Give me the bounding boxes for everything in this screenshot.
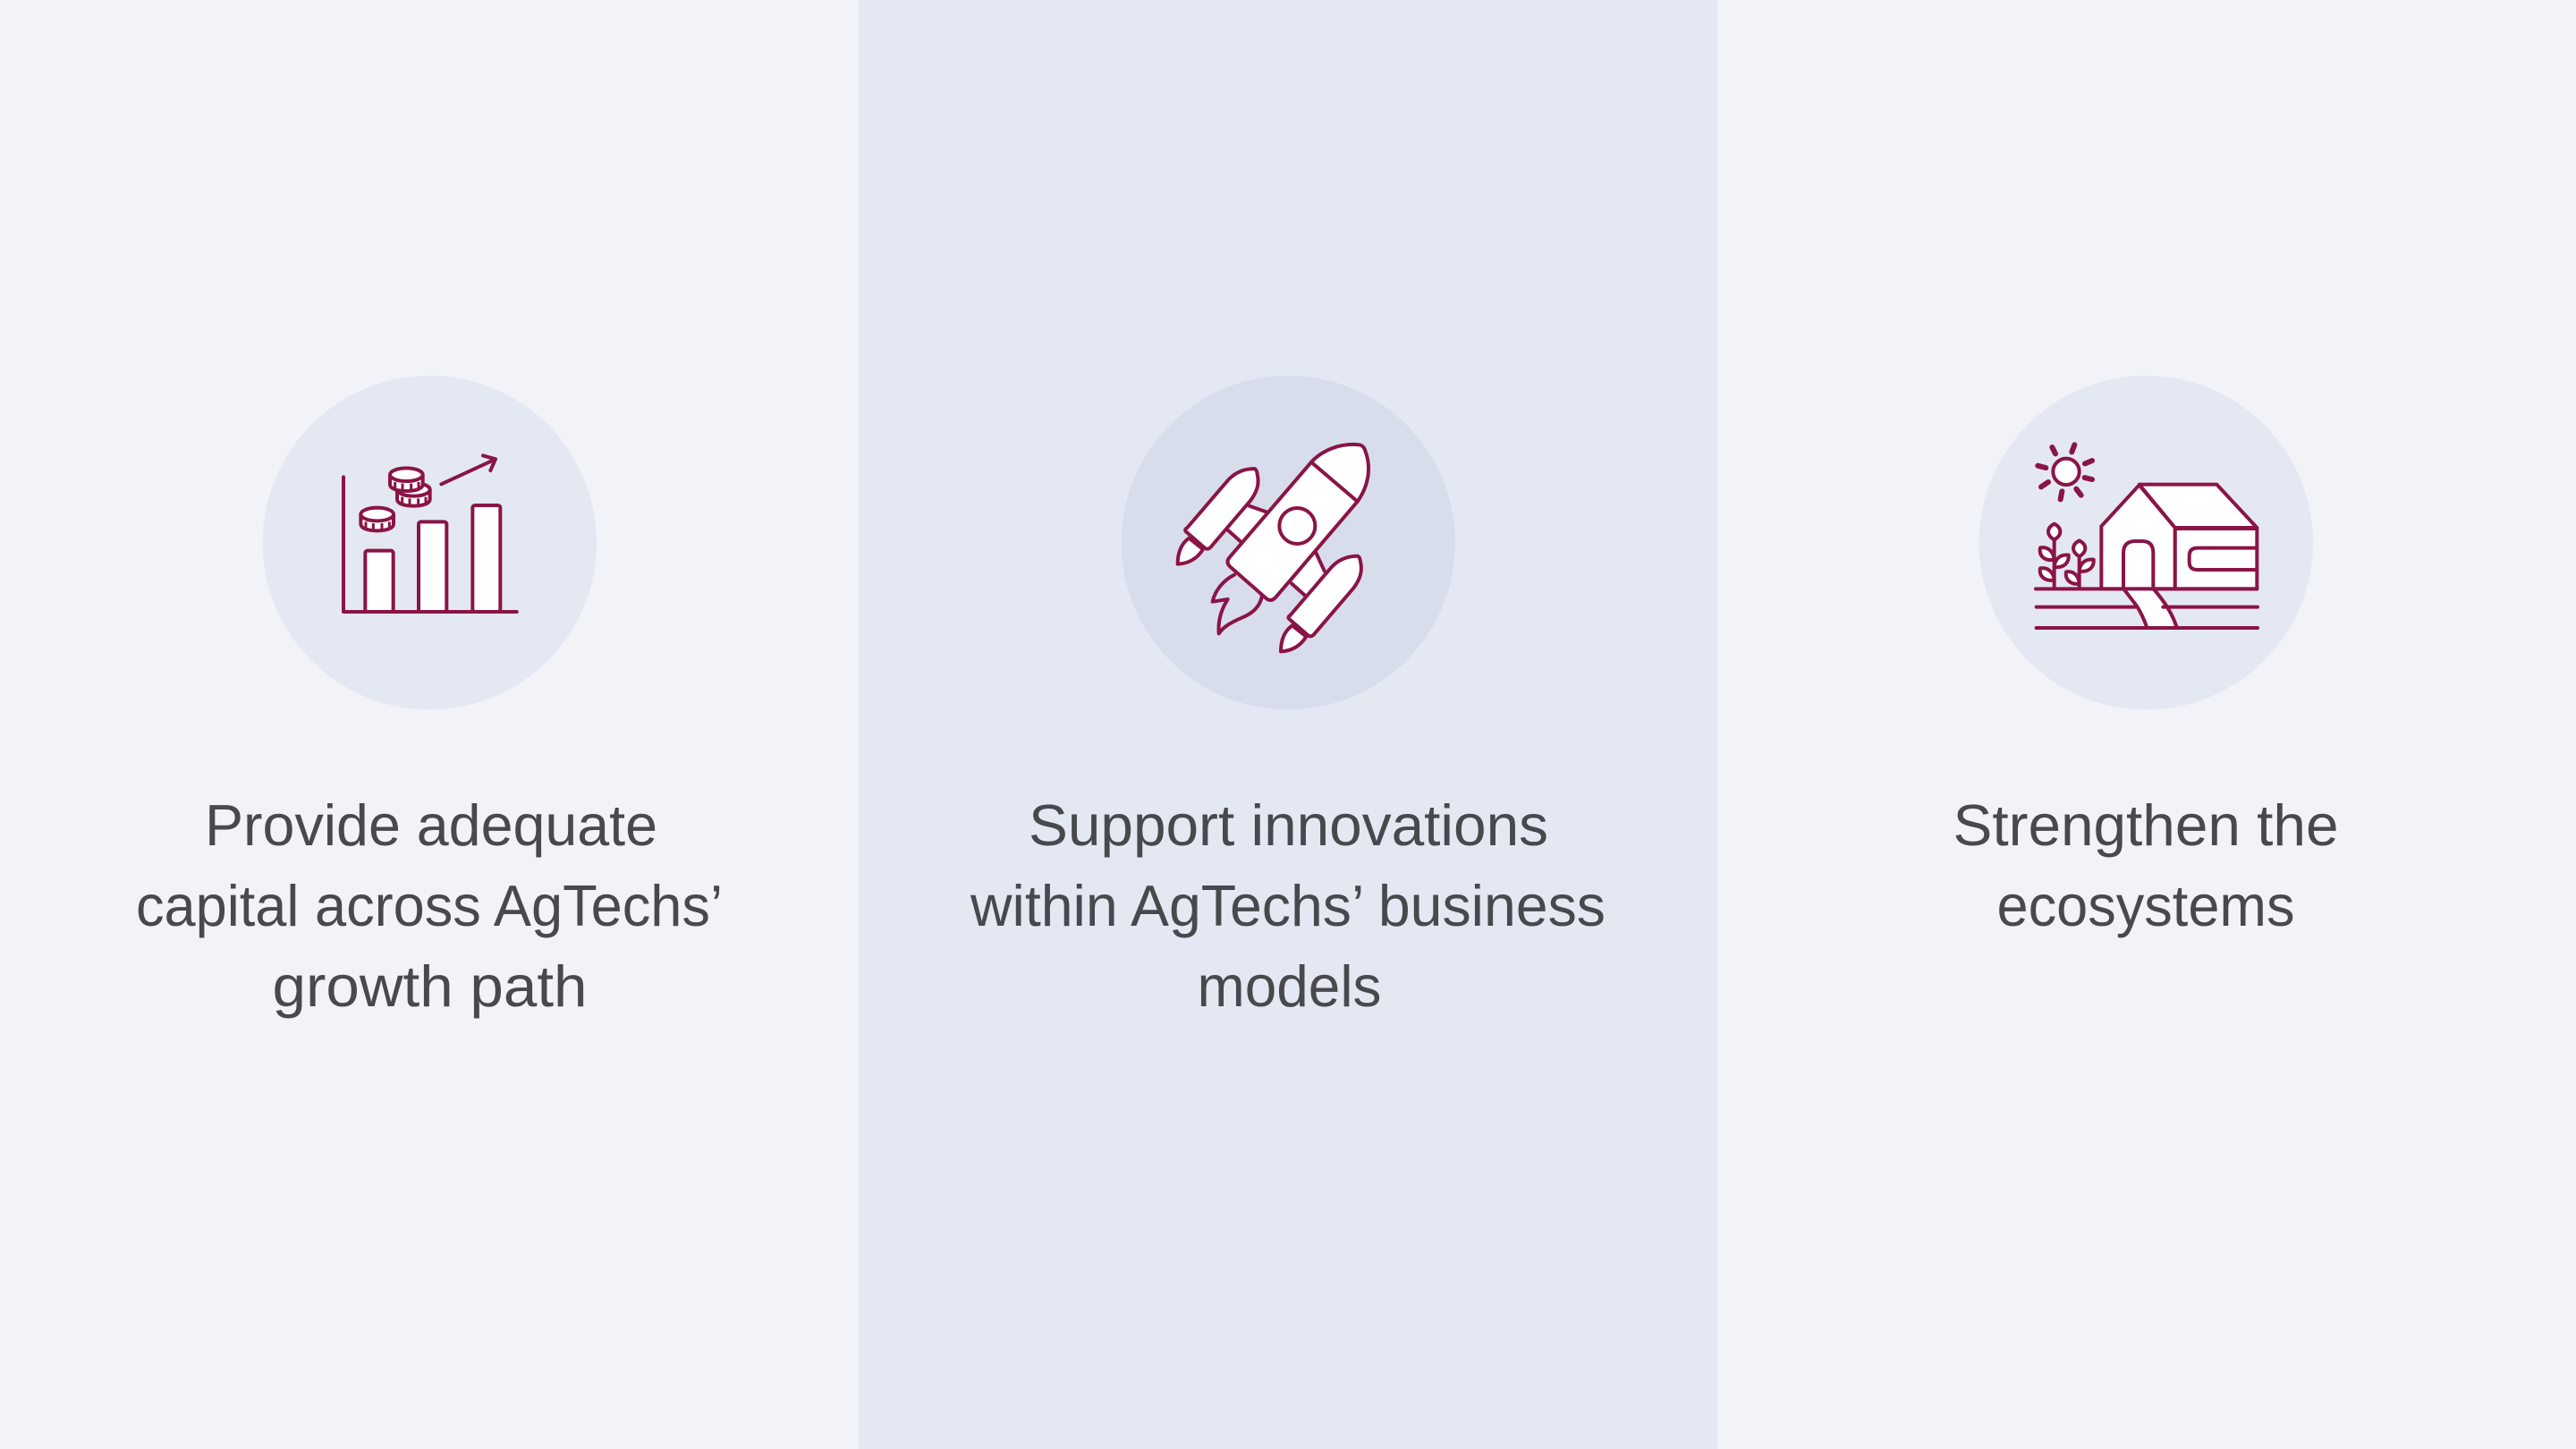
sun <box>2038 445 2092 499</box>
left booster <box>1178 469 1258 564</box>
icon circle: ecosystem <box>1979 376 2313 709</box>
text: capital: capital across AgTechs’ <box>136 873 723 938</box>
text: innovation: models <box>1197 953 1381 1019</box>
text: ecosystem: Strengthen the <box>1953 792 2338 858</box>
house front <box>2101 485 2175 589</box>
icon circle: capital <box>263 376 597 709</box>
house door <box>2123 541 2153 589</box>
rocket window <box>1279 508 1315 544</box>
text: innovation: Support innovations <box>1029 792 1548 858</box>
plant: tall <box>2040 524 2069 588</box>
plant: short <box>2066 540 2094 588</box>
garden path <box>2124 589 2176 627</box>
text: capital: Provide adequate <box>205 792 657 858</box>
panel: middle background <box>859 0 1717 1449</box>
text: capital <box>136 792 723 1019</box>
icon: rocket with boosters <box>1178 445 1368 651</box>
connector struts <box>1228 505 1325 597</box>
panel: left background <box>0 0 859 1449</box>
coin: single <box>360 508 394 530</box>
text: innovation <box>970 792 1606 1019</box>
text: ecosystem: ecosystems <box>1996 873 2295 938</box>
right booster <box>1281 556 1361 651</box>
house side <box>2175 529 2257 589</box>
chart bars <box>365 505 500 612</box>
panel: right background <box>1717 0 2576 1449</box>
icon circle: innovation <box>1122 376 1455 709</box>
main flame <box>1213 575 1262 633</box>
coin: stack lower <box>397 483 430 506</box>
icon: bar chart with coins and arrow <box>343 455 517 612</box>
ground lines <box>2036 589 2258 628</box>
coin: stack upper <box>390 468 423 491</box>
icon: farm house with sun and plants <box>2036 445 2258 628</box>
nose divider <box>1311 462 1358 502</box>
growth arrow <box>441 455 496 484</box>
rocket body <box>1227 445 1368 600</box>
house window <box>2190 548 2257 570</box>
house roof <box>2140 485 2257 528</box>
text: capital: growth path <box>272 953 587 1019</box>
text: ecosystem <box>1953 792 2338 938</box>
text: innovation: within AgTechs’ business <box>970 873 1606 938</box>
chart axes <box>343 477 517 612</box>
